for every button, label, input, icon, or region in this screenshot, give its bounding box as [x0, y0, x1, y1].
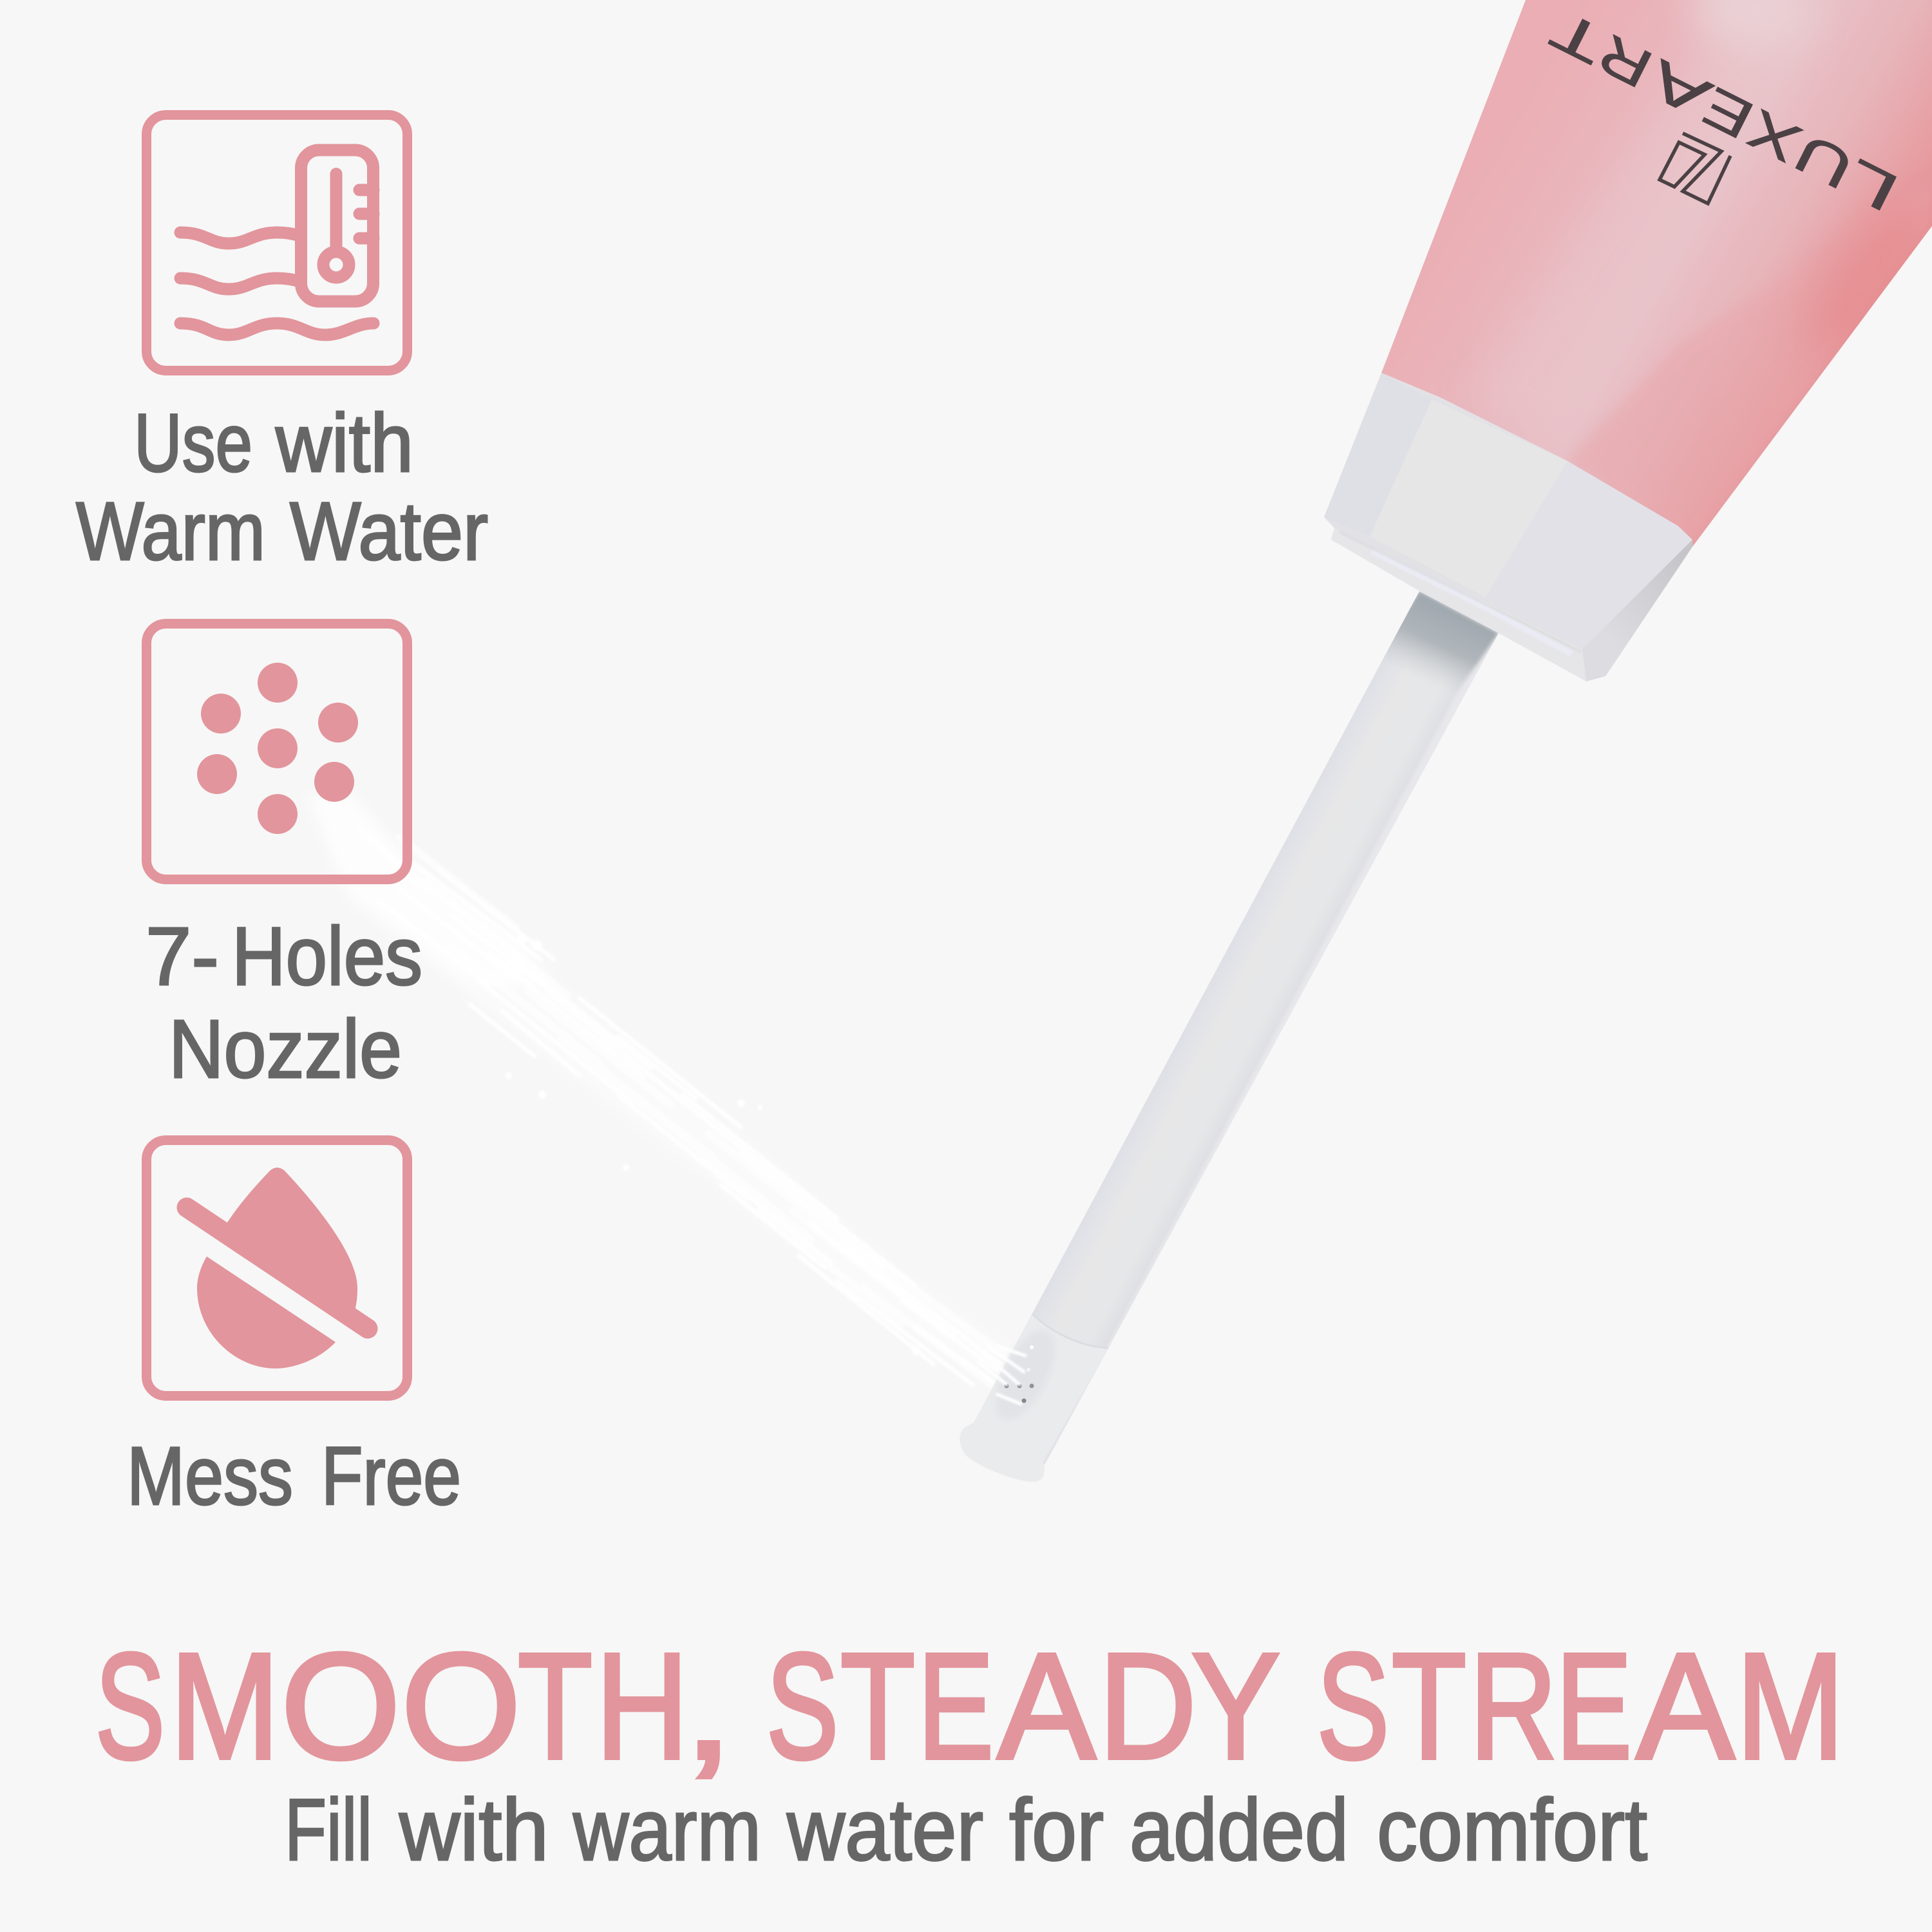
brand wordmark: E	[1693, 75, 1763, 151]
brand wordmark: T	[1541, 0, 1615, 76]
nozzle seam	[1032, 1314, 1108, 1348]
title: A	[998, 1622, 1095, 1790]
subtitle: added	[1130, 1781, 1349, 1879]
title: A	[1636, 1622, 1734, 1790]
label: use with warm water: Use	[134, 397, 252, 489]
label: mess free: Mess	[127, 1430, 293, 1522]
title: O	[401, 1622, 521, 1790]
subtitle: with	[399, 1781, 549, 1879]
title: D	[1099, 1622, 1197, 1790]
nozzle tip with flange	[960, 1314, 1108, 1482]
label: use with warm water: with	[275, 397, 413, 489]
title: R	[1470, 1622, 1557, 1790]
brand wordmark: R	[1588, 23, 1662, 100]
product: tube body	[1381, 0, 1932, 547]
label: 7-holes nozzle: Holes	[232, 911, 422, 1003]
brand logo mark	[1660, 133, 1730, 204]
subtitle: Fill	[285, 1781, 372, 1879]
title: E	[918, 1622, 994, 1790]
title: S	[766, 1622, 838, 1790]
icon: mess free crossed drop	[147, 1140, 407, 1396]
brand wordmark: U	[1785, 122, 1863, 202]
brand wordmark: X	[1738, 98, 1810, 175]
title: S	[1317, 1622, 1389, 1790]
title: T	[840, 1622, 915, 1790]
label: use with warm water: Warm	[76, 486, 265, 578]
brand wordmark: A	[1639, 48, 1720, 129]
water spray stream	[308, 795, 1018, 1394]
title: S	[95, 1622, 165, 1790]
label: 7-holes nozzle: 7-	[146, 911, 219, 1003]
subtitle: warm	[573, 1781, 761, 1879]
label: mess free: Free	[321, 1430, 461, 1522]
icon: warm water thermometer	[147, 115, 407, 371]
icon: seven hole nozzle	[147, 623, 407, 880]
label: use with warm water: Water	[290, 486, 488, 578]
title: ,	[683, 1622, 734, 1790]
title: E	[1556, 1622, 1632, 1790]
title: M	[170, 1622, 279, 1790]
title: Y	[1191, 1622, 1278, 1790]
product: applicator nozzle stick	[960, 591, 1499, 1482]
brand wordmark: L	[1836, 147, 1908, 224]
label: 7-holes nozzle: Nozzle	[169, 1003, 402, 1095]
title: H	[596, 1622, 688, 1790]
title: T	[518, 1622, 592, 1790]
title: O	[281, 1622, 401, 1790]
subtitle: water	[786, 1781, 983, 1879]
title: T	[1392, 1622, 1466, 1790]
subtitle: comfort	[1377, 1781, 1647, 1879]
title: M	[1736, 1622, 1844, 1790]
subtitle: for	[1009, 1781, 1104, 1879]
product: white cap	[1324, 373, 1692, 681]
nozzle recess and holes	[979, 1321, 1067, 1428]
